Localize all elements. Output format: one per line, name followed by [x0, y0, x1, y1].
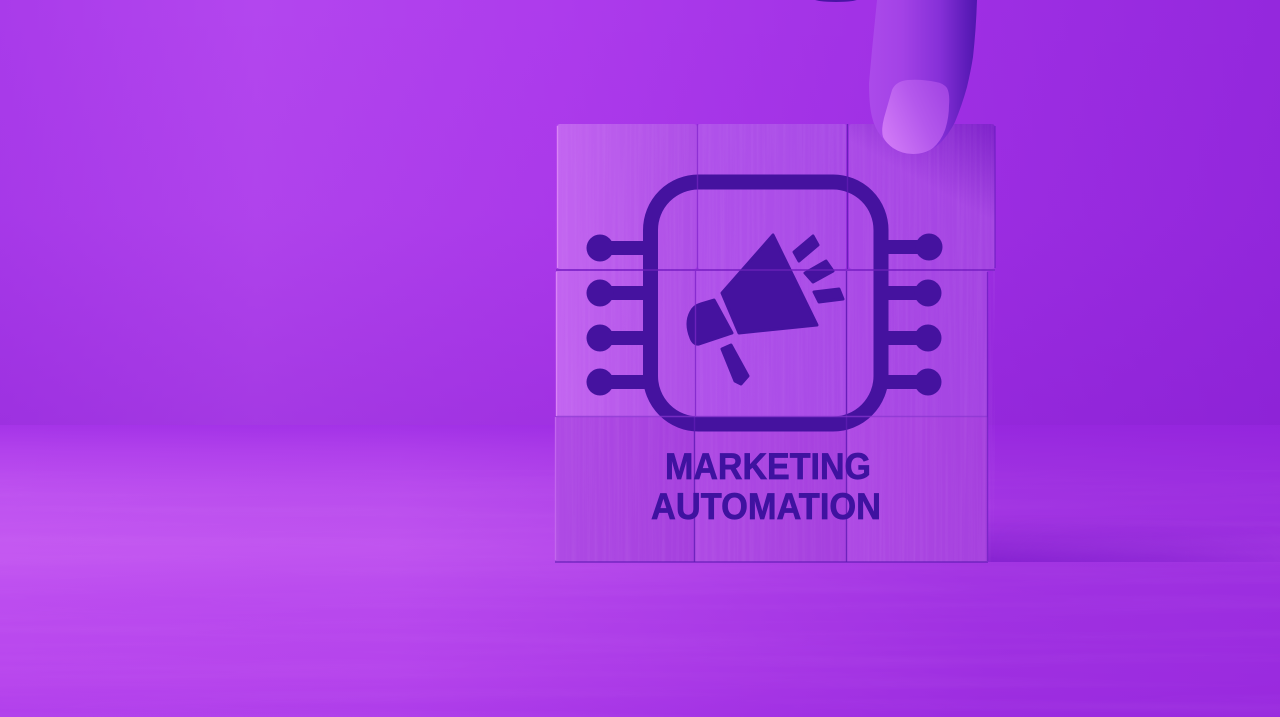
background wall	[0, 0, 1280, 430]
fingernail	[882, 80, 949, 154]
blocks: wooden puzzle grid	[555, 124, 995, 562]
finger touching the block	[869, 0, 977, 154]
fingertip at top edge	[814, 0, 858, 2]
table surface	[0, 425, 1280, 717]
block shadow on table	[988, 526, 1246, 562]
label line: marketing: MARKETING	[665, 446, 871, 487]
text: block label	[651, 446, 881, 527]
label line: automation: AUTOMATION	[651, 486, 881, 527]
icon: megaphone	[688, 235, 843, 384]
block seams	[555, 124, 995, 562]
icon: automation chip outline with pins	[586, 182, 942, 424]
